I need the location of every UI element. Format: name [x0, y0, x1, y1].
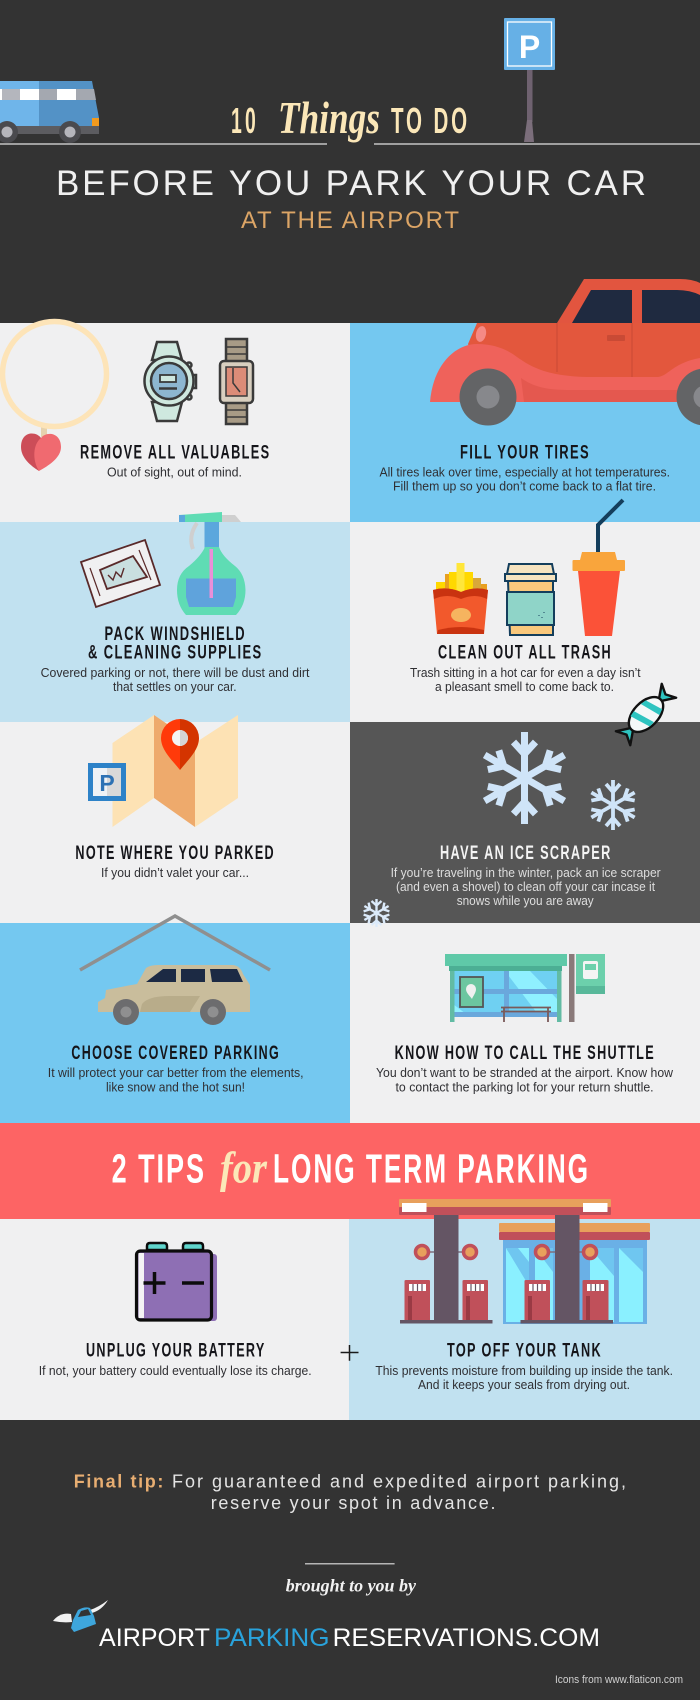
- icon: soda cup: [572, 500, 625, 636]
- final tip: For guaranteed and expedited airport parking,: [172, 1472, 626, 1492]
- final tip: Final tip:: [74, 1472, 163, 1492]
- icon: coffee cup: [505, 564, 556, 635]
- text block: If you’re traveling in the winter, pack an ice scraper: [391, 865, 661, 880]
- text block: If not, your battery could eventually lose its charge.: [39, 1363, 312, 1378]
- text block: [375, 1363, 673, 1392]
- title: 10 things to do: Things: [278, 92, 380, 143]
- panel: choose covered parking: [0, 916, 350, 1123]
- heading: PACK WINDSHIELD: [104, 624, 246, 645]
- text block: And it keeps your seals from drying out.: [418, 1377, 630, 1392]
- logo: airportparkingreservations.com: PARKING: [214, 1624, 330, 1652]
- panel: clean out all trash: [350, 500, 700, 722]
- text block: Trash sitting in a hot car for even a day isn’t: [410, 665, 641, 680]
- icon: small snowflake: [588, 780, 638, 830]
- text block: that settles on your car.: [113, 679, 237, 694]
- logo: airportparkingreservations.com: RESERVATIONS.COM: [333, 1624, 600, 1652]
- icon: large snowflake: [479, 732, 570, 824]
- heading: [88, 624, 262, 664]
- heading: CLEAN OUT ALL TRASH: [438, 643, 612, 664]
- text block: like snow and the hot sun!: [106, 1080, 245, 1095]
- icon: parking square: P: [99, 770, 115, 796]
- heading: FILL YOUR TIRES: [460, 442, 590, 464]
- text block: All tires leak over time, especially at hot temperatures.: [380, 465, 670, 480]
- icon: plus sign: [341, 1345, 358, 1361]
- brought to you by: brought to you by: [286, 1576, 417, 1596]
- panel: unplug your battery: [0, 1219, 349, 1420]
- final tip: [74, 1472, 626, 1513]
- title: 10 things to do: 10: [231, 100, 259, 141]
- icon: tan suv: [98, 965, 250, 1025]
- panel: know how to call the shuttle: [350, 923, 700, 1123]
- footer section: [0, 1420, 700, 1700]
- icon: parking sign: [504, 18, 555, 142]
- heading: UNPLUG YOUR BATTERY: [86, 1341, 266, 1362]
- text block: [41, 665, 310, 694]
- heading: HAVE AN ICE SCRAPER: [440, 843, 612, 864]
- text block: a pleasant smell to come back to.: [435, 679, 614, 694]
- icon: analog watch: [220, 339, 253, 424]
- icon: battery: [136, 1243, 217, 1321]
- icon: van: [0, 81, 99, 143]
- heading: & CLEANING SUPPLIES: [88, 643, 262, 664]
- banner: 2 tips for long term parking: 2 TIPS: [112, 1145, 206, 1191]
- text block: [48, 1065, 304, 1095]
- banner: 2 tips for long term parking: [0, 1123, 700, 1219]
- icon: necklace with heart: [2, 322, 106, 471]
- logo: winged car: [53, 1600, 108, 1632]
- subtitle: at the airport: AT THE AIRPORT: [241, 207, 459, 234]
- text block: (and even a shovel) to clean off your car incase it: [396, 879, 655, 894]
- text block: It will protect your car better from the elements,: [48, 1065, 304, 1080]
- text block: Covered parking or not, there will be dust and dirt: [41, 665, 310, 680]
- text block: to contact the parking lot for your return shuttle.: [396, 1080, 654, 1095]
- header section: [0, 0, 700, 323]
- icon: gas station: [399, 1199, 650, 1324]
- text block: Out of sight, out of mind.: [107, 465, 242, 480]
- panel: fill your tires: [350, 279, 700, 522]
- text block: You don’t want to be stranded at the airport. Know how: [376, 1065, 674, 1080]
- text block: [391, 865, 661, 908]
- heading: CHOOSE COVERED PARKING: [71, 1043, 280, 1064]
- heading: NOTE WHERE YOU PARKED: [75, 843, 275, 864]
- icon: candy: [614, 682, 678, 747]
- text block: [380, 465, 670, 494]
- icon: map with pin: [112, 715, 238, 827]
- icon: spray bottle: [177, 512, 246, 615]
- logo: airportparkingreservations.com: [99, 1624, 600, 1652]
- heading: REMOVE ALL VALUABLES: [80, 442, 270, 464]
- text block: snows while you are away: [457, 893, 594, 908]
- text block: [376, 1065, 674, 1095]
- subtitle: before you park your car: BEFORE YOU PARK YOUR CAR: [56, 164, 646, 203]
- text block: [410, 665, 641, 694]
- text block: Fill them up so you don’t come back to a flat tire.: [393, 479, 656, 494]
- icon: carport roof: [80, 916, 270, 970]
- credit: Icons from www.flaticon.com: [555, 1674, 683, 1686]
- icon: parking sign: P: [519, 29, 540, 65]
- panel: note where you parked: [0, 715, 350, 923]
- title: 10 things to do: TO DO: [391, 100, 470, 141]
- banner: 2 tips for long term parking: for: [220, 1143, 268, 1192]
- text block: This prevents moisture from building up inside the tank.: [375, 1363, 673, 1378]
- panel: pack windshield and cleaning supplies: [0, 512, 350, 722]
- final tip: reserve your spot in advance.: [211, 1493, 495, 1513]
- panel: have an ice scraper: [350, 682, 700, 927]
- panel: top off your tank: [349, 1199, 700, 1420]
- title: 10 things to do: [231, 92, 470, 143]
- icon: wipes: [81, 540, 160, 607]
- panel: remove all valuables: [0, 322, 350, 522]
- icon: red car: [430, 279, 700, 426]
- icon: parking square: [88, 763, 126, 801]
- ground line: [0, 143, 700, 145]
- icon: fries: [433, 563, 488, 634]
- heading: TOP OFF YOUR TANK: [447, 1341, 602, 1362]
- icon: bus stop: [445, 954, 605, 1022]
- text block: If you didn’t valet your car...: [101, 865, 249, 880]
- icon: tiny snowflake: [362, 899, 391, 927]
- logo: airportparkingreservations.com: AIRPORT: [99, 1624, 210, 1652]
- icon: digital watch: [144, 342, 196, 421]
